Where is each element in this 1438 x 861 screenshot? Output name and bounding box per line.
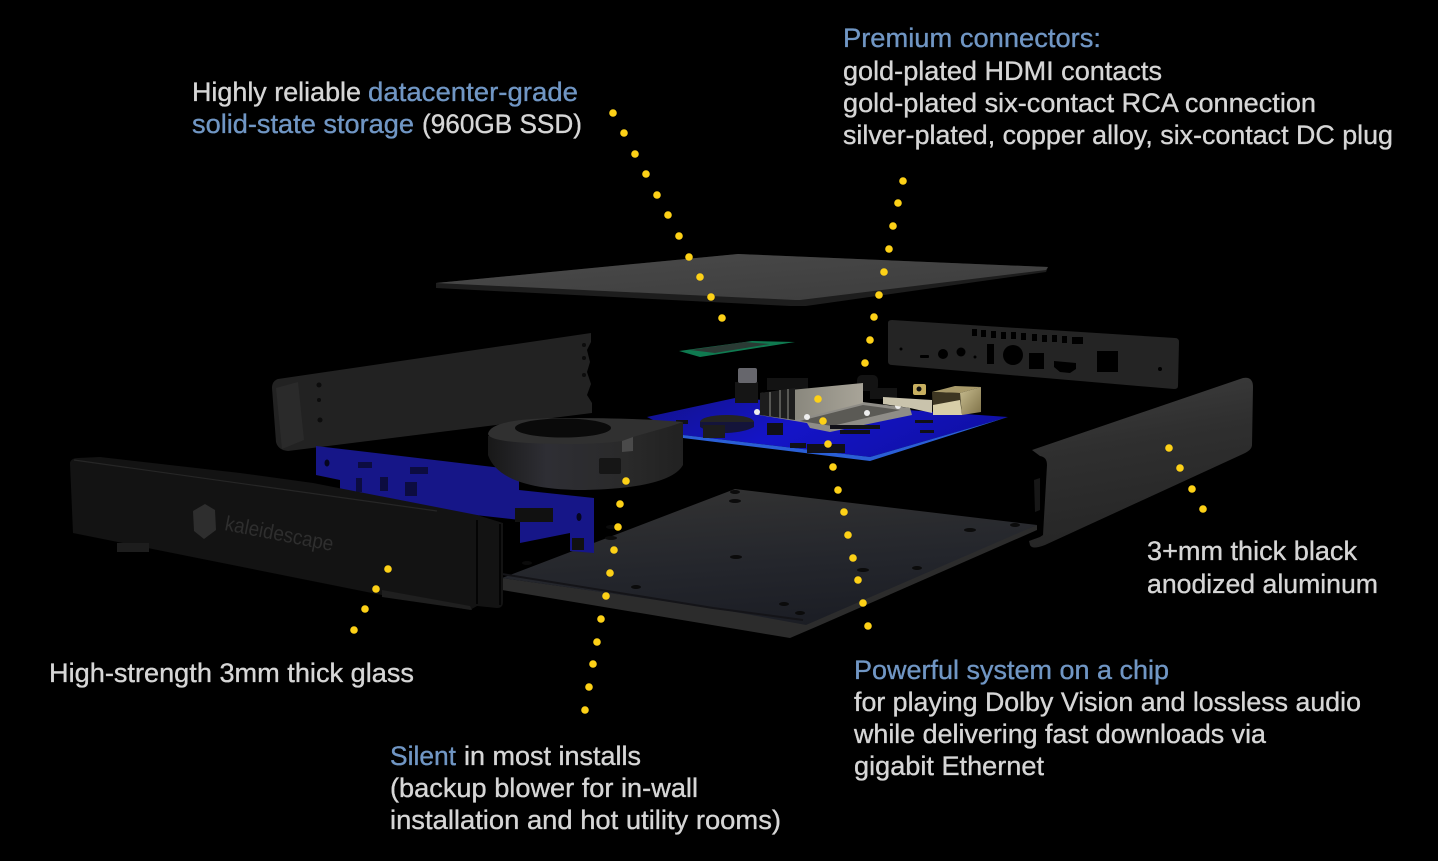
panel: left side rail	[272, 333, 592, 451]
component: blower fan	[488, 418, 683, 490]
callout: system on a chip: gigabit Ethernet	[854, 751, 1044, 781]
callout: silent: in most installs	[464, 741, 641, 771]
component: secondary blue board	[316, 446, 594, 553]
dotted leader: aluminum	[1165, 444, 1207, 513]
callout: storage: datacenter-grade	[368, 77, 578, 107]
panel: bottom base plate	[502, 489, 1037, 638]
callout: premium connectors: Premium connectors:	[843, 23, 1101, 53]
panel: top cover plate	[436, 254, 1048, 306]
callout: silent: (backup blower for in-wall	[390, 773, 698, 803]
callout: aluminum	[1147, 536, 1378, 599]
callout: glass: High-strength 3mm thick glass	[49, 658, 414, 688]
panel: right rail	[1029, 378, 1253, 548]
callout: premium connectors: gold-plated HDMI contacts	[843, 56, 1162, 86]
callout: silent: Silent	[390, 741, 456, 771]
callout: system on a chip: for playing Dolby Vision and lossless audio	[854, 687, 1361, 717]
logo wordmark: kaleidescape	[223, 512, 335, 556]
component: capacitor knob	[735, 368, 758, 403]
callout: storage: solid-state storage	[192, 109, 414, 139]
dotted leader: silent blower	[581, 477, 630, 714]
callout: aluminum: 3+mm thick black	[1147, 536, 1357, 566]
dotted leader: glass	[350, 565, 392, 634]
callout: system on a chip: Powerful system on a chip	[854, 655, 1169, 685]
callout: silent	[390, 741, 781, 835]
callout: system on a chip: while delivering fast downloads via	[853, 719, 1267, 749]
component: black parts behind heat sink	[767, 375, 897, 399]
component: chips and capacitors	[676, 415, 934, 453]
callout: premium connectors	[843, 23, 1393, 150]
component: heat sink and silver shield	[753, 383, 912, 432]
panel: rear connector plate	[888, 320, 1179, 389]
dotted leader: connectors	[861, 177, 907, 367]
component: storage SSD	[679, 341, 795, 357]
callout: system on a chip	[853, 655, 1361, 781]
callout: storage: (960GB SSD)	[422, 109, 582, 139]
callout: silent: installation and hot utility rooms)	[390, 805, 781, 835]
callout: storage	[192, 77, 582, 139]
panel: front glass with logo	[70, 457, 503, 610]
logo mark	[193, 504, 216, 539]
component: gold connector	[883, 384, 981, 415]
dotted leader: storage	[609, 109, 726, 322]
callout: aluminum: anodized aluminum	[1147, 569, 1378, 599]
callout: storage: Highly reliable	[192, 77, 361, 107]
dotted leader: system on a chip	[814, 395, 872, 630]
panel: main blue circuit board	[647, 368, 1008, 461]
callout: premium connectors: silver-plated, copper alloy, six-contact DC plug	[843, 120, 1393, 150]
callout: premium connectors: gold-plated six-contact RCA connection	[843, 88, 1316, 118]
